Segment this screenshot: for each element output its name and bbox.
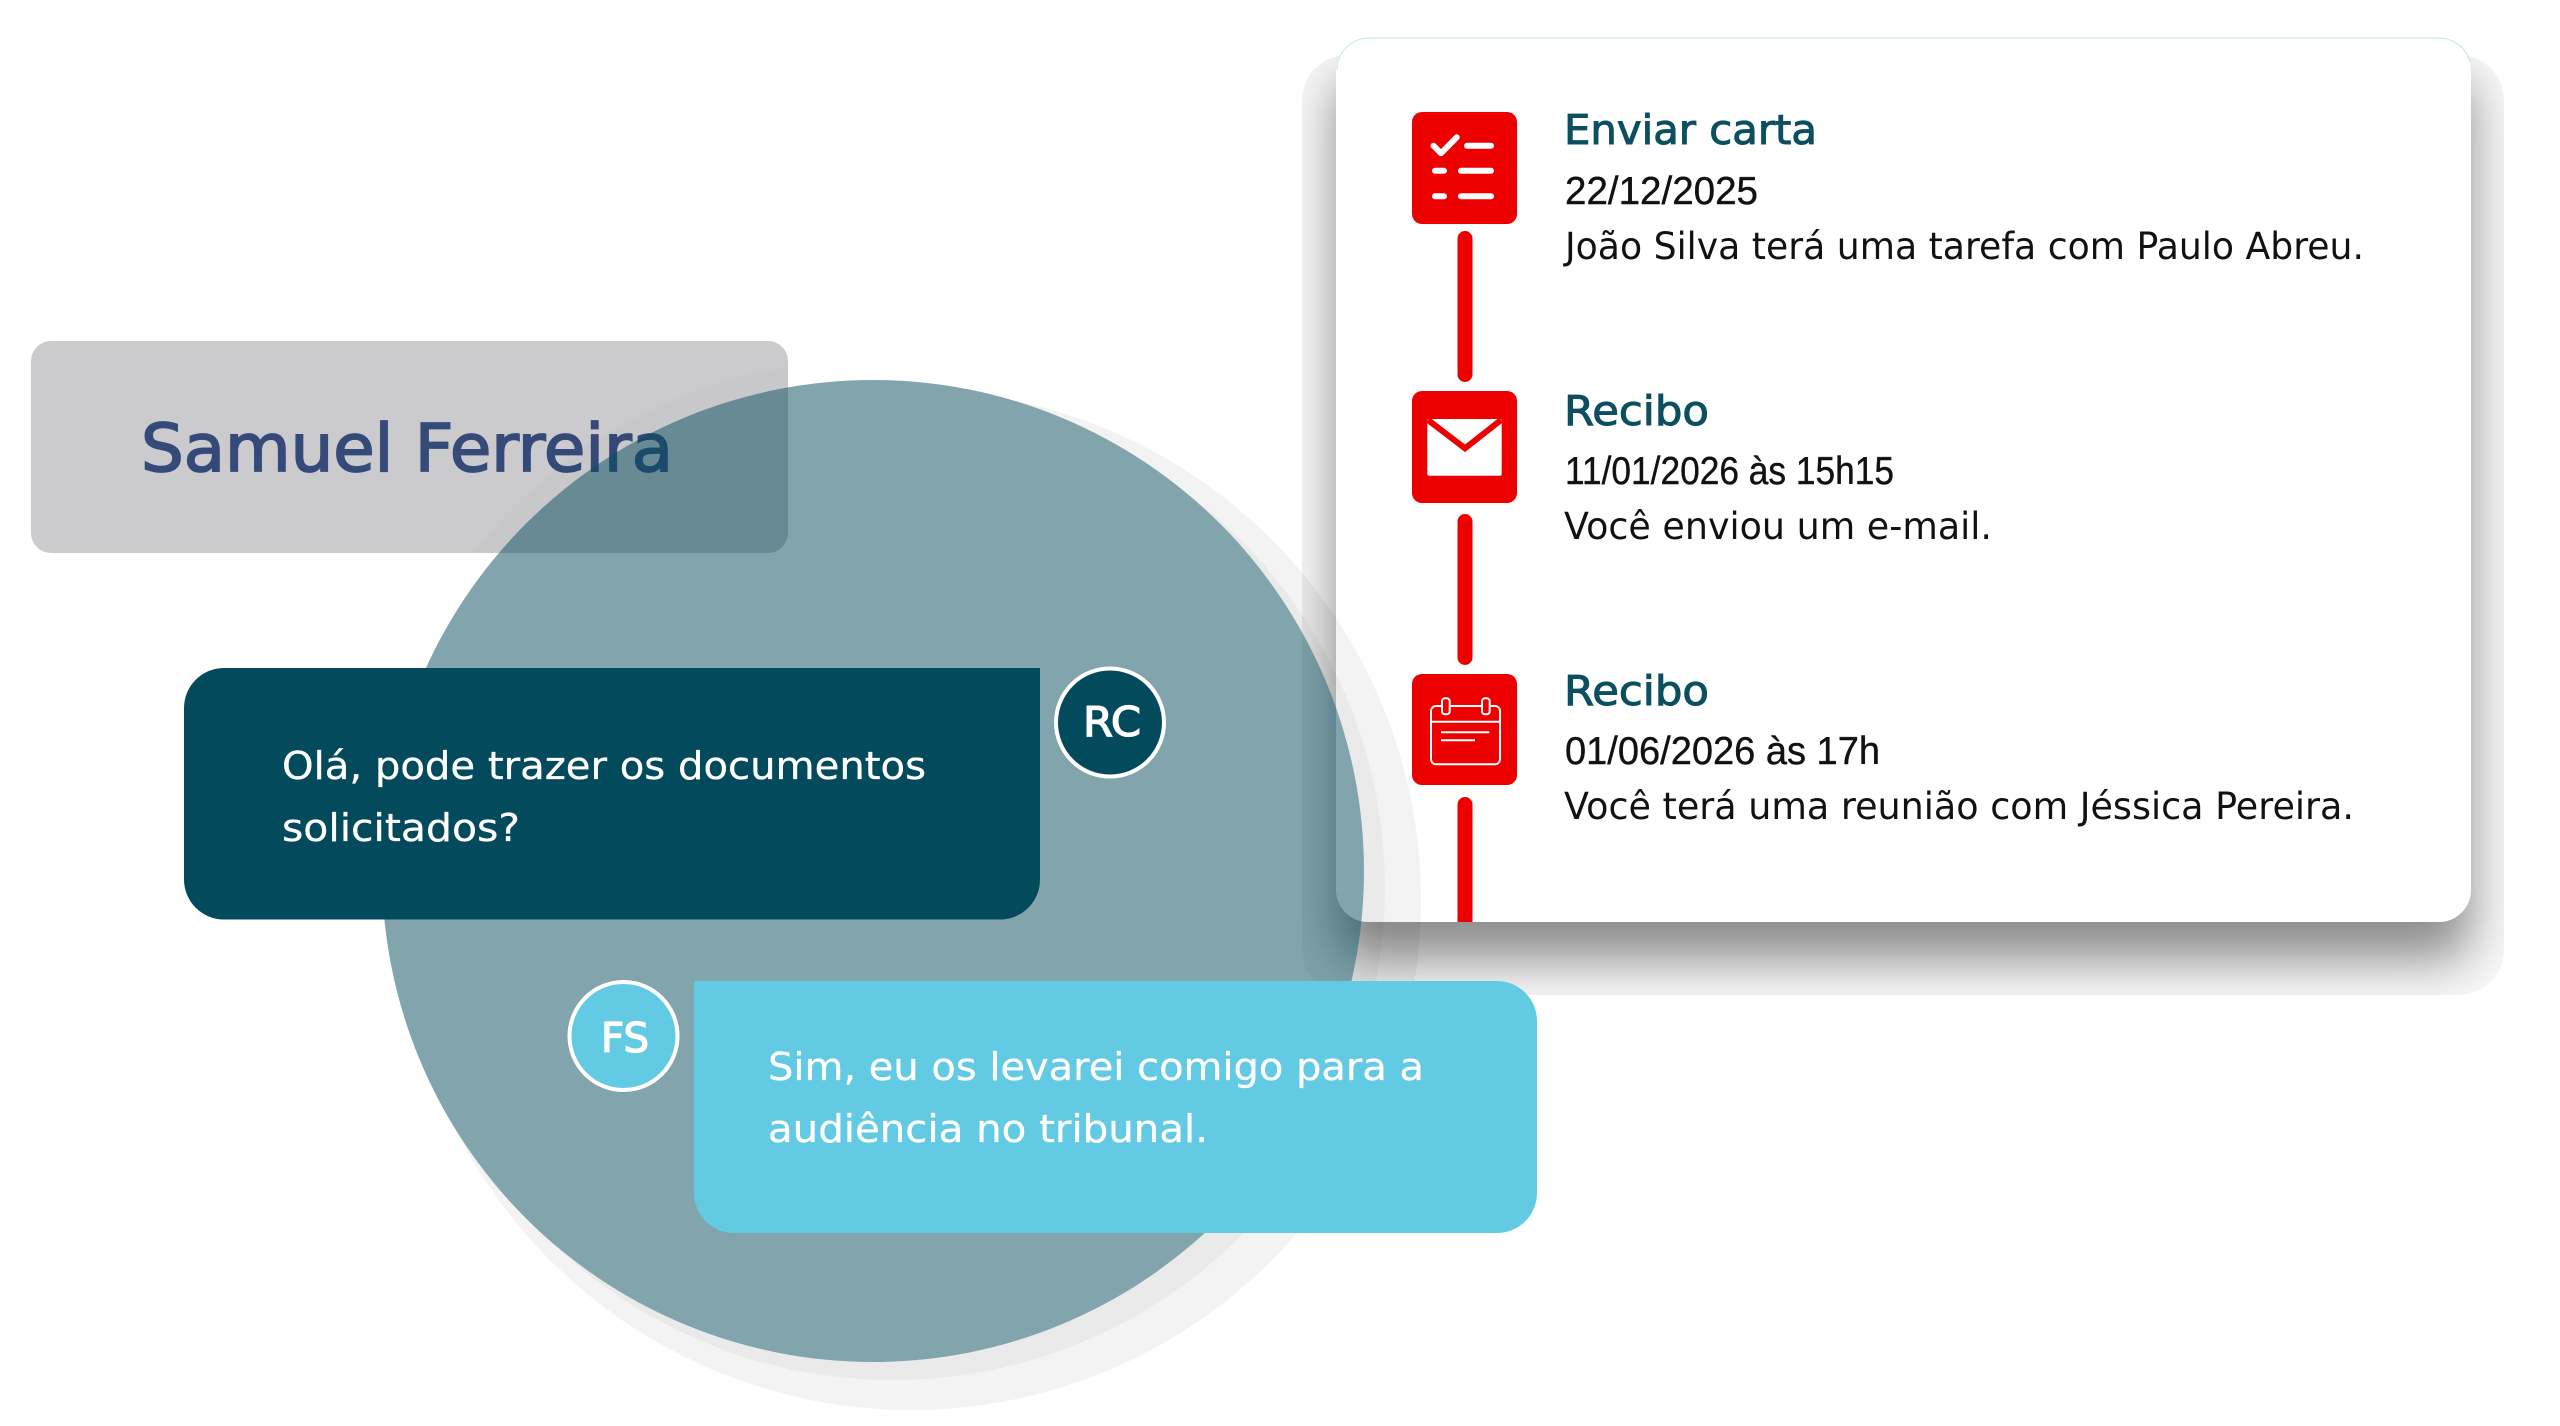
translucent teal circle	[382, 380, 1364, 1362]
message text RC	[282, 744, 926, 850]
message text FS: audiência no tribunal.	[768, 1107, 1208, 1151]
heading: name: Samuel Ferreira	[141, 410, 673, 487]
entry 2 text	[1564, 387, 1992, 548]
entry 1 text: João Silva terá uma tarefa com Paulo Abreu.	[1563, 225, 2364, 268]
card stepped shadow	[1302, 55, 2504, 995]
entry 1 text: 22/12/2025	[1565, 170, 1758, 213]
entry 2 text: Recibo	[1564, 387, 1709, 435]
entry 3 text: 01/06/2026 às 17h	[1565, 730, 1880, 773]
message text FS	[768, 1045, 1424, 1151]
entry 1 text	[1563, 106, 2364, 268]
message text RC: Olá, pode trazer os documentos	[282, 744, 926, 788]
avatar RC	[1056, 668, 1164, 776]
message text RC: solicitados?	[282, 806, 520, 850]
entry 3 text: Você terá uma reunião com Jéssica Pereira.	[1564, 785, 2354, 828]
entry 2 text: Você enviou um e-mail.	[1564, 505, 1992, 548]
panel: timeline card	[1302, 38, 2504, 995]
circle soft shadow	[458, 401, 1421, 1410]
entry 3 text: Recibo	[1564, 667, 1709, 715]
entry 1 text: Enviar carta	[1564, 106, 1817, 154]
avatar FS: FS	[601, 1014, 649, 1062]
avatar RC: RC	[1083, 698, 1141, 746]
entry 3 text	[1564, 667, 2354, 828]
icon: calendar	[1412, 674, 1517, 785]
panel: chat bubble FS	[694, 981, 1537, 1233]
message text FS: Sim, eu os levarei comigo para a	[768, 1045, 1424, 1089]
timeline connector lines	[1458, 231, 1472, 957]
icon: task checklist	[1412, 112, 1517, 224]
icon: envelope	[1412, 391, 1517, 503]
panel: name label	[31, 341, 788, 553]
panel: chat bubble RC	[184, 668, 1040, 920]
card background	[1336, 38, 2471, 922]
avatar FS	[570, 982, 678, 1090]
entry 2 text: 11/01/2026 às 15h15	[1565, 450, 1894, 493]
